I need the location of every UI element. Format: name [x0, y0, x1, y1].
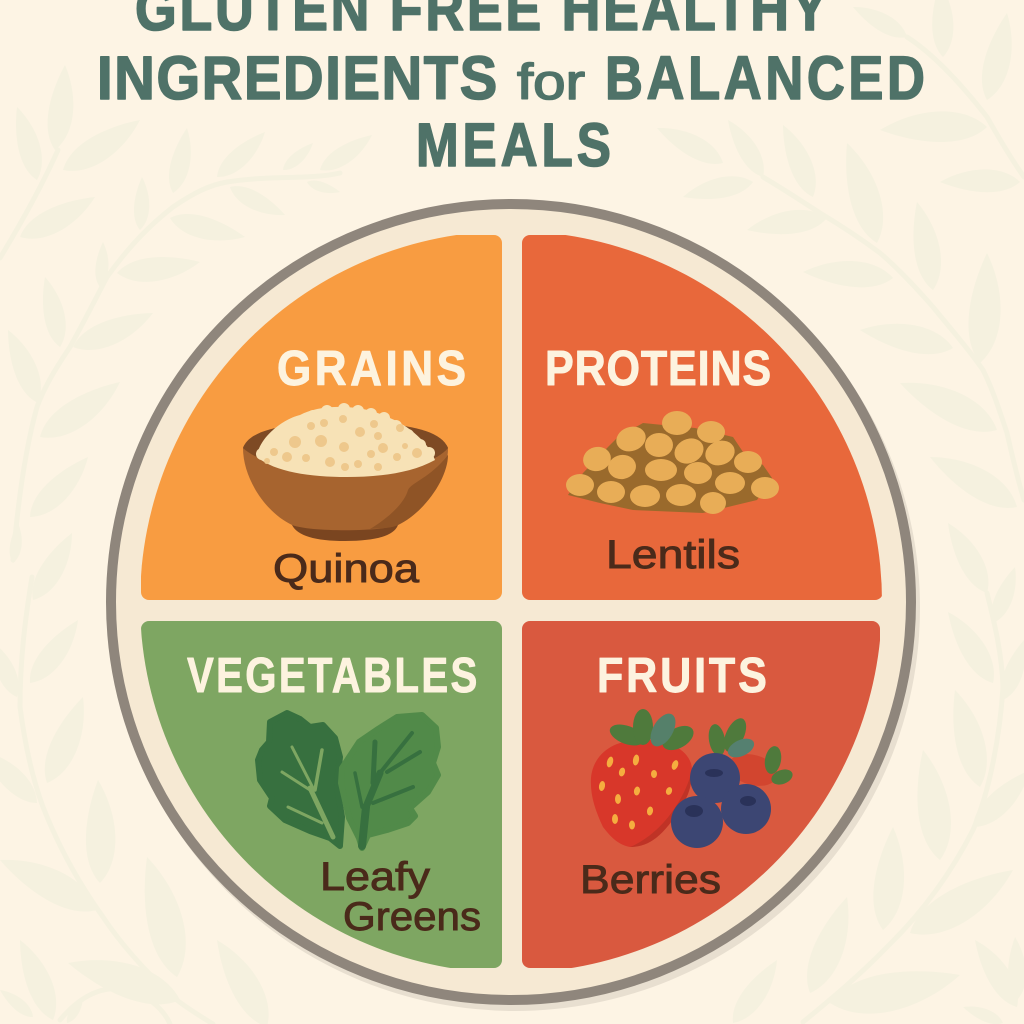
- heading: fruits: FRUITS: [597, 647, 767, 703]
- plate: [110, 204, 920, 1011]
- heading: grains: GRAINS: [277, 341, 466, 396]
- label: leafy greens: Leafy: [320, 855, 430, 899]
- blueberries: [671, 753, 771, 848]
- heading: vegetables: VEGETABLES: [187, 648, 477, 703]
- title: for: [517, 54, 585, 110]
- panel: grains: [141, 235, 502, 600]
- title: INGREDIENTS: [97, 45, 497, 113]
- small strawberry: [706, 715, 795, 791]
- icon: berries: [591, 709, 795, 848]
- label: quinoa: Quinoa: [273, 547, 420, 591]
- title: BALANCED: [605, 44, 925, 113]
- title: MEALS: [416, 111, 611, 179]
- large strawberry: [591, 740, 692, 847]
- icon: quinoa bowl: [243, 403, 448, 541]
- panel: vegetables: [141, 621, 502, 968]
- icon: leafy greens: [258, 713, 438, 848]
- heading: proteins: PROTEINS: [545, 340, 771, 396]
- label: leafy greens: Greens: [343, 895, 481, 939]
- icon: lentils: [566, 411, 779, 514]
- label: leafy greens: [320, 855, 481, 939]
- panel: proteins: [522, 235, 883, 600]
- title: [97, 0, 925, 179]
- panel: fruits: [522, 621, 880, 968]
- label: berries: Berries: [580, 858, 721, 902]
- label: lentils: Lentils: [606, 533, 740, 577]
